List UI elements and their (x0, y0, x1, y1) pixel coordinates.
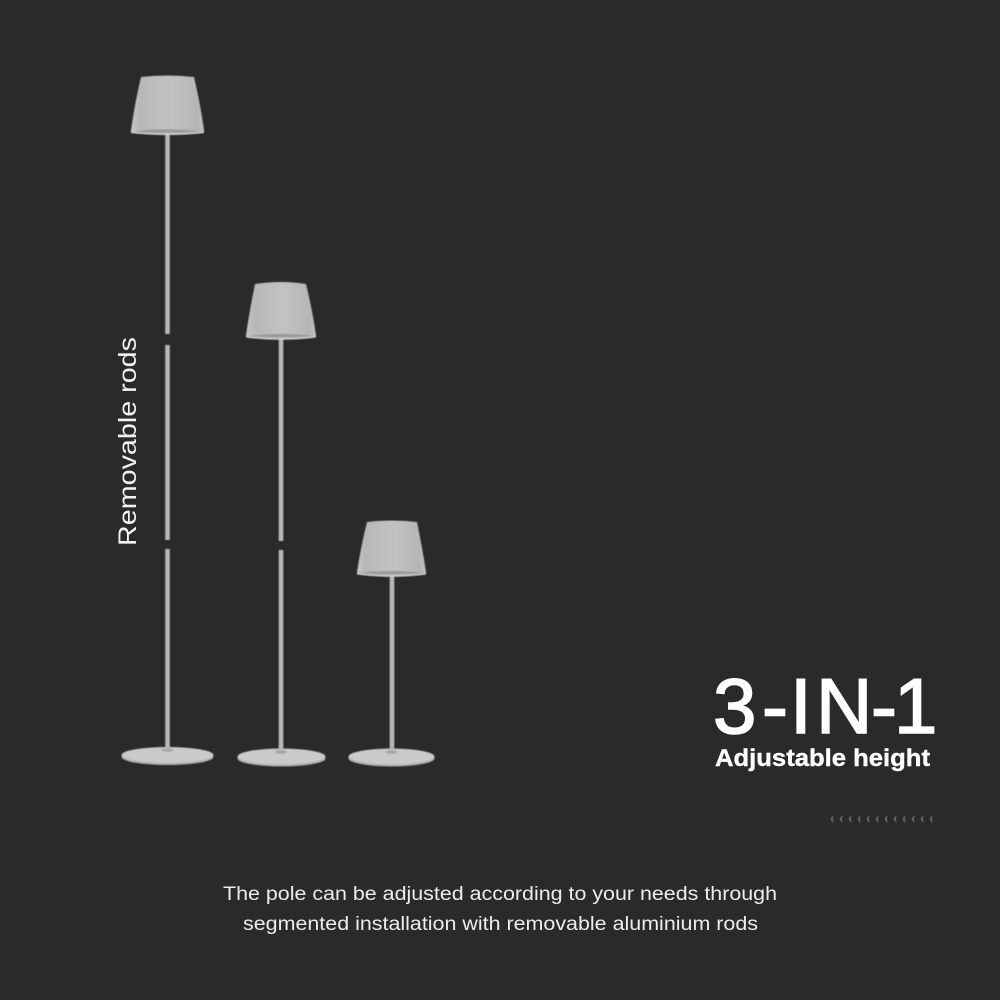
medium lamp base (238, 748, 326, 766)
description text (223, 884, 777, 935)
medium lamp rod segments (279, 338, 283, 751)
tall lamp shade (131, 76, 204, 135)
label: removable rods: Removable rods (114, 337, 142, 546)
tall lamp base (122, 747, 214, 765)
short lamp shade (357, 520, 426, 577)
short lamp base (348, 748, 434, 766)
heading: 3-in-1: 3-IN-1 (713, 662, 937, 750)
medium lamp shade (246, 282, 316, 340)
tall lamp rod segments (165, 134, 170, 749)
short lamp rod (390, 575, 394, 751)
short lamp (348, 520, 434, 766)
medium lamp (238, 282, 326, 766)
description text: The pole can be adjusted according to your needs through (223, 884, 777, 905)
decorative chevron row (831, 815, 933, 823)
description text: segmented installation with removable aluminium rods (243, 914, 758, 935)
subheading: adjustable height: Adjustable height (715, 745, 930, 772)
tall lamp (122, 76, 214, 765)
